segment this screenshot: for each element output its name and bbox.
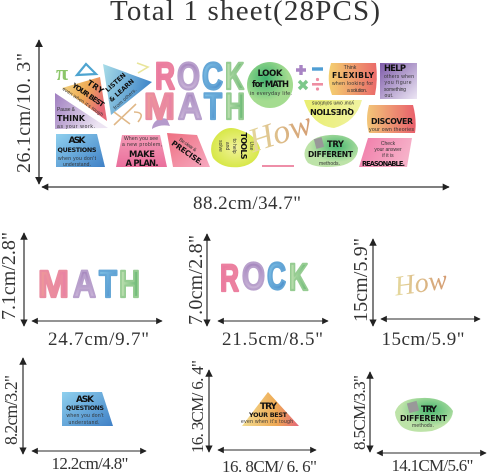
heading word: MATH: A (178, 86, 202, 127)
sticker: try your best: YOUR BEST (70, 81, 106, 109)
sticker: ask questions: ASK (68, 136, 87, 146)
sticker: think flexibly: Think (344, 65, 357, 71)
sticker: make a plan (116, 135, 167, 168)
sticker: look for math: LOOK (258, 69, 283, 79)
sticker: try different methods: DIFFERENT (308, 150, 354, 159)
sticker: try your best: even when it's tough (61, 86, 104, 118)
word: MATH (38, 264, 140, 306)
sticker: discover: DISCOVER (371, 117, 413, 126)
dimension: full sheet height: 26.1cm/10. 3" (13, 53, 35, 173)
sticker: look for math: in everyday life. (250, 91, 292, 97)
sticker: look for math: for MATH (252, 79, 289, 89)
icon: minus (312, 67, 323, 71)
heading word: ROCK: C (202, 56, 223, 98)
icon: purple protractor (152, 118, 170, 129)
sticker: think flexibly: FLEXIBLY (332, 71, 374, 80)
sticker: make a plan: A PLAN. (126, 158, 158, 168)
sticker: ask questions (56, 134, 105, 168)
word: MATH: H (119, 264, 140, 306)
sticker: discover: your own theories (369, 127, 414, 133)
heading word: ROCK: K (225, 56, 244, 98)
sticker: be precise: PRECISE. (170, 139, 205, 167)
sticker: make a plan: a new problem, (122, 142, 162, 148)
word: ROCK: R (220, 258, 239, 300)
panel: How sticker size: 15cm/5.9" (350, 238, 372, 322)
sticker: discover (367, 105, 416, 133)
sticker: try your best: TRY (260, 402, 277, 412)
dimension: full sheet width: 88.2cm/34.7" (193, 193, 301, 214)
sticker: use tools: solve (217, 140, 223, 152)
sticker: pause and think (55, 93, 108, 130)
icon: blue triangle outline (77, 64, 96, 75)
sticker: help others: others when (384, 74, 414, 80)
heading word: ROCK (155, 56, 244, 98)
sticker: be precise: Be clear & (178, 137, 198, 154)
word: How: How (391, 264, 449, 303)
sticker: make a plan: MAKE (129, 149, 155, 159)
sticker: try your best (241, 392, 299, 426)
sticker: think flexibly: when looking for (332, 81, 373, 87)
heading word: MATH (144, 86, 245, 127)
sticker: ask questions: QUESTIONS (66, 405, 104, 412)
panel: How sticker size: 15cm/5.9" (382, 329, 464, 350)
sticker: listen and learn: LISTEN (104, 71, 128, 94)
sticker: think flexibly (329, 63, 377, 95)
sticker: try different: TRY (421, 405, 437, 415)
panel: MATH sticker size (0, 232, 162, 350)
panel: TRY DIFFERENT sticker size: 8.5CM/3.3" (350, 375, 369, 450)
word: ROCK: O (242, 256, 265, 298)
word: MATH: A (73, 264, 96, 306)
word: MATH: M (38, 264, 69, 306)
icon: angle mark (137, 63, 148, 73)
icon: pencil and ruler doodle (114, 104, 141, 125)
panel: ROCK sticker size: 7.0cm/2.8" (185, 235, 207, 325)
sticker: ask questions: when you don't (58, 156, 97, 162)
sticker: help others: you figure (384, 80, 412, 86)
sticker: help others: out. (384, 93, 394, 99)
sticker: pause and think: as your work. (57, 124, 95, 130)
word: ROCK (220, 256, 308, 300)
sticker: listen and learn (103, 64, 152, 115)
panel: TRY DIFFERENT sticker size (350, 372, 486, 473)
panel: TRY YOUR BEST sticker size: 16. 3CM/ 6. 4" (188, 360, 207, 453)
word: ROCK: C (267, 256, 286, 298)
panel: ROCK sticker size: 21.5cm/8.5" (222, 329, 323, 350)
sticker: listen and learn: from others. (113, 87, 138, 111)
panel: ASK QUESTIONS sticker size: 12.2cm/4.8" (52, 454, 128, 473)
sticker: try different methods (304, 135, 358, 167)
panel: MATH sticker size: 24.7cm/9.7" (48, 329, 149, 350)
panel: full sticker sheet (55, 56, 417, 168)
sticker: ask questions: QUESTIONS (58, 146, 97, 154)
sticker: think flexibly: a solution. (347, 88, 367, 94)
sticker: make a plan: When you see (124, 136, 158, 142)
sticker: look for math (247, 62, 293, 108)
panel: How sticker size (350, 238, 480, 350)
sticker: check reasonable: Check (381, 141, 396, 147)
sticker: try different (395, 398, 453, 432)
word: MATH: T (99, 264, 117, 306)
sticker: use tools: to help (231, 138, 237, 154)
sticker: use tools: and (224, 142, 230, 150)
sticker: help others: HELP (384, 63, 406, 73)
heading word: MATH: H (225, 86, 245, 127)
sticker: be precise (167, 133, 210, 167)
sticker: help others (380, 63, 417, 99)
sticker: check reasonable (359, 138, 412, 168)
word: ROCK: K (289, 257, 308, 299)
icon: pi: π (56, 60, 68, 85)
sticker: try your best (61, 77, 107, 121)
sticker: ask questions: ASK (76, 395, 95, 405)
panel: TRY YOUR BEST sticker size (188, 360, 317, 473)
sticker: question your solutions (304, 100, 362, 128)
sticker: check reasonable: if it is (382, 153, 394, 159)
sticker: how doodle: How (243, 105, 317, 160)
icon: times (299, 81, 307, 89)
sticker: pause and think: THINK (57, 114, 86, 123)
sticker: ask questions (62, 392, 113, 426)
panel: ROCK sticker size (185, 234, 328, 350)
heading word: ROCK: R (155, 56, 175, 98)
sticker: try different: methods. (412, 423, 434, 429)
sticker: check reasonable: your answer (374, 147, 402, 153)
sticker: ask questions: when you don't (66, 413, 104, 419)
sticker: use tools (211, 128, 260, 167)
panel: ASK QUESTIONS sticker size: 8.2cm/3.2" (1, 375, 21, 445)
sticker: use tools: TOOLS (239, 132, 248, 160)
sticker: pause and think: Pause & (57, 107, 76, 113)
sticker: try your best: even when it's tough (241, 419, 293, 425)
heading word: ROCK: O (177, 56, 200, 98)
sticker: listen and learn: & LEARN (107, 77, 136, 104)
panel: ASK QUESTIONS sticker size (1, 358, 146, 473)
sticker: help others: something (384, 87, 406, 93)
sticker: ask questions: understand. (68, 420, 100, 426)
sticker: check reasonable: REASONABLE. (362, 160, 405, 168)
icon: divide (312, 78, 323, 91)
sticker: ask questions: understand. (63, 162, 91, 168)
sticker: question your solutions: QUESTION (310, 107, 354, 116)
icon: plus (296, 65, 306, 75)
sticker: try different methods: TRY (327, 139, 345, 149)
sticker: try your best: YOUR BEST (248, 411, 288, 419)
sticker: use tools: Use (248, 142, 254, 151)
sticker: try your best: TRY (85, 78, 106, 96)
sticker: question your solutions: your own solutions (312, 100, 354, 106)
sticker: try different methods: methods. (319, 161, 340, 167)
sticker: try different: DIFFERENT (400, 414, 448, 423)
heading word: MATH: M (144, 86, 175, 127)
heading word: MATH: T (204, 86, 222, 127)
